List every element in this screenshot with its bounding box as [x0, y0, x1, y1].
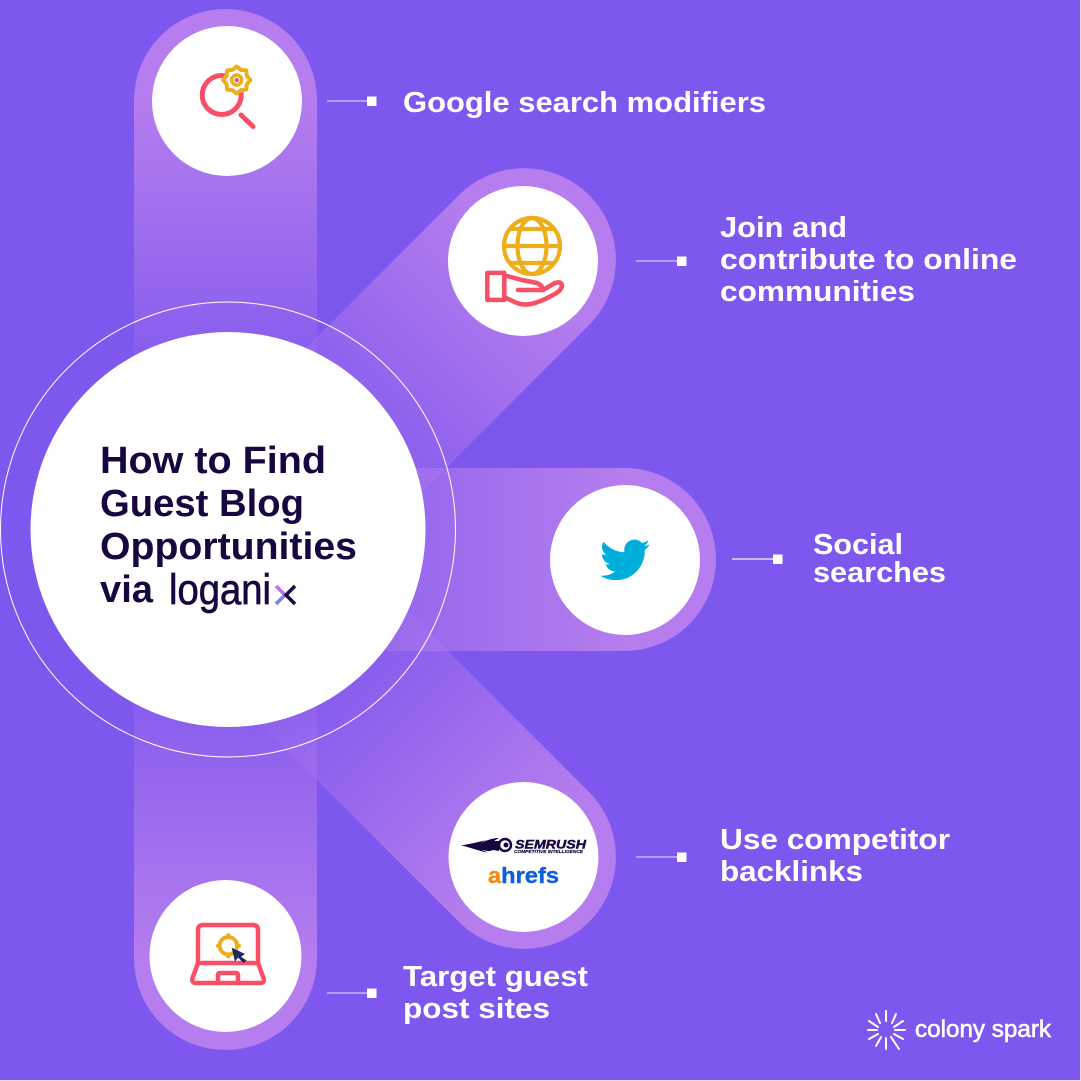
node: target guest post sites icon — [150, 880, 302, 1032]
node: competitor backlinks logos: COMPETITIVE INTELLIGENCE — [514, 849, 584, 854]
connector: target guest post sites — [327, 988, 376, 998]
title — [100, 440, 357, 611]
capsule: top vertical bar — [134, 9, 317, 530]
colony spark logo — [868, 1011, 1052, 1049]
label: competitor backlinks — [720, 824, 950, 888]
connector: social searches — [732, 554, 782, 564]
capsule: lower diagonal bar — [200, 533, 616, 949]
connector: competitor backlinks — [636, 852, 686, 862]
node: competitor backlinks logos: SEMRUSH — [515, 838, 587, 852]
label: social searches: Social — [813, 529, 903, 561]
label: online communities: communities — [720, 276, 915, 308]
title: How to Find — [100, 440, 326, 482]
label: competitor backlinks: Use competitor — [720, 824, 950, 856]
label: social searches — [813, 529, 946, 589]
label: online communities: Join and — [720, 212, 847, 244]
label: google search modifiers: Google search modifiers — [403, 87, 766, 119]
title: Opportunities — [100, 526, 357, 568]
connector: google search modifiers — [327, 96, 376, 106]
capsule: horizontal bar — [228, 468, 716, 651]
title: Guest Blog — [100, 483, 304, 525]
center white circle — [30, 332, 426, 727]
label: online communities: contribute to online — [720, 244, 1017, 276]
label: target guest post sites — [403, 961, 588, 1025]
capsule: bottom vertical bar — [134, 530, 317, 1050]
colony spark logo: colony spark — [915, 1016, 1052, 1043]
node: social searches icon — [550, 485, 700, 635]
capsule: upper diagonal bar — [200, 168, 616, 584]
node: competitor backlinks logos — [448, 782, 598, 932]
label: competitor backlinks: backlinks — [720, 856, 863, 888]
label: social searches: searches — [813, 557, 946, 589]
center ring — [0, 302, 456, 757]
node: competitor backlinks logos: ahrefs — [488, 863, 559, 888]
label: target guest post sites: post sites — [403, 993, 550, 1025]
node: online communities icon — [448, 186, 598, 336]
label: target guest post sites: Target guest — [403, 961, 588, 993]
connector: online communities — [636, 256, 686, 266]
label: online communities — [720, 212, 1017, 308]
title: via — [100, 569, 154, 611]
node: google search modifiers icon — [152, 26, 302, 176]
loganix logo: logani — [169, 566, 271, 614]
